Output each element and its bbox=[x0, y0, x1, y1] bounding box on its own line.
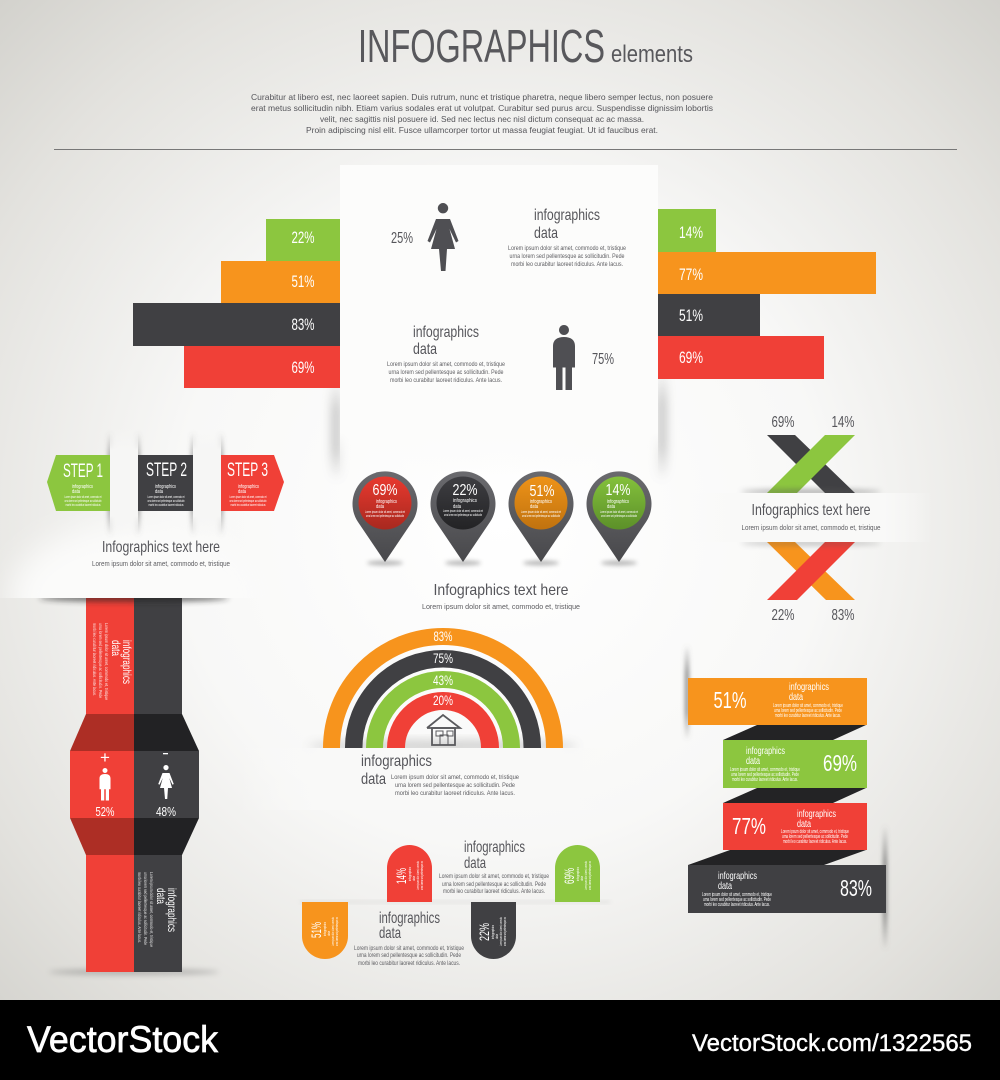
row: 83%: 83% bbox=[840, 875, 872, 901]
tab: 22%: Lorem ipsum dolor sit amet, commodo bbox=[499, 917, 503, 946]
arc labels: 75% bbox=[433, 650, 453, 666]
text block: bottom data upper bbox=[439, 839, 549, 895]
pin 69%: 69% bbox=[372, 482, 398, 499]
tab: 14%: data bbox=[411, 876, 416, 881]
label: 75%: 75% bbox=[592, 351, 614, 368]
icon: woman small bbox=[158, 765, 174, 799]
intro text: Proin adipiscing nisl elit. Fusce ullamcorper tortor ut massa feugiat feugiat. Ut id faucibus erat. bbox=[306, 125, 658, 135]
row: 51%: urna lorem sed pellentesque ac sollicitudin. Pede bbox=[774, 708, 842, 714]
text block: second data: urna lorem sed pellentesque ac sollicitudin. Pede bbox=[388, 369, 504, 376]
icon: house bbox=[427, 715, 460, 745]
upper cross bbox=[767, 435, 855, 493]
row: 77% bbox=[723, 803, 867, 850]
arc labels: 20% bbox=[433, 692, 453, 708]
row: 51%: morbi leo curabitur laoreet ridiculus. Ante lacus. bbox=[775, 713, 841, 719]
labels: 83% bbox=[832, 607, 854, 624]
step 3: morbi leo curabitur laoreet ridiculus bbox=[230, 503, 266, 507]
intro text bbox=[251, 92, 713, 135]
left bar chart: 69% bbox=[292, 358, 314, 377]
tab: 51%: Lorem ipsum dolor sit amet, commodo bbox=[331, 917, 335, 946]
pin 51%: urna lorem sed pellentesque ac sollicitudin bbox=[522, 514, 560, 518]
pin 51%: infographics bbox=[530, 499, 552, 505]
pin 51%: data bbox=[530, 504, 539, 510]
row: 77%: morbi leo curabitur laoreet ridiculus. Ante lacus. bbox=[783, 839, 847, 845]
tab: 22%: urna lorem sed pellentesque ac bbox=[503, 917, 507, 946]
text block: bottom data upper: morbi leo curabitur laoreet ridiculus. Ante lacus. bbox=[443, 888, 545, 895]
pin 22%: infographics bbox=[453, 498, 477, 504]
tab: 69%: urna lorem sed pellentesque ac bbox=[588, 861, 592, 890]
text block: bottom data lower: Lorem ipsum dolor sit amet, commodo et, tristique bbox=[354, 945, 464, 952]
tab: 69% bbox=[555, 845, 600, 902]
text block: top data bbox=[508, 207, 626, 268]
text block: top data: data bbox=[534, 225, 558, 242]
pin 51%: 51% bbox=[530, 483, 554, 500]
label: 25%: 25% bbox=[391, 230, 413, 247]
labels bbox=[772, 414, 854, 624]
step 3: Lorem ipsum dolor sit amet, commodo et bbox=[230, 495, 267, 499]
pin 69%: data bbox=[376, 504, 385, 510]
text block: top data: urna lorem sed pellentesque ac sollicitudin. Pede bbox=[510, 253, 625, 260]
pin 14%: Lorem ipsum dolor sit amet, commodo et bbox=[600, 510, 638, 514]
row: 69% bbox=[723, 740, 867, 788]
right bar chart: 77% bbox=[679, 265, 703, 284]
rotated text: lower dark: infographics bbox=[165, 888, 179, 932]
text block: arc data: Lorem ipsum dolor sit amet, commodo et, tristique bbox=[391, 774, 520, 781]
text block: second data bbox=[387, 324, 505, 384]
tab: 51%: infographics bbox=[322, 922, 327, 936]
text block: arc data: urna lorem sed pellentesque ac sollicitudin. Pede bbox=[395, 782, 515, 789]
paper strips bbox=[110, 428, 138, 538]
rotated text: lower dark: morbi leo curabitur laoreet ridiculus. Ante lacus. bbox=[136, 872, 142, 943]
step 2 bbox=[138, 455, 193, 511]
rotated text: upper red: Lorem ipsum dolor sit amet, commodo et, tristique bbox=[103, 623, 109, 700]
tab: 69%: 69% bbox=[561, 868, 577, 884]
male stat bbox=[553, 325, 614, 390]
tab: 22%: 22% bbox=[476, 923, 492, 941]
lower cross bbox=[767, 542, 855, 600]
rotated text: lower dark: data bbox=[154, 888, 168, 904]
pin 22% bbox=[430, 471, 496, 566]
step 1: urna lorem sed pellentesque ac sollicitudin bbox=[64, 499, 102, 503]
tab: 69%: Lorem ipsum dolor sit amet, commodo bbox=[584, 861, 588, 890]
row: 83%: infographics bbox=[718, 870, 757, 882]
tab: 51% bbox=[302, 902, 348, 959]
tab: 51%: data bbox=[326, 931, 331, 936]
panel: steps bbox=[8, 436, 284, 598]
folds bbox=[723, 725, 866, 740]
arc 43% bbox=[374, 680, 512, 748]
panel: X crosses bbox=[690, 414, 932, 624]
step 3 bbox=[221, 455, 284, 511]
text block: arc data: data bbox=[361, 771, 386, 788]
rotated text: upper red: infographics bbox=[120, 640, 134, 684]
caption: Lorem ipsum dolor sit amet, commodo et, tristique bbox=[742, 523, 880, 532]
text block: second data: morbi leo curabitur laoreet ridiculus. Ante lacus. bbox=[390, 377, 502, 384]
footer watermark bar bbox=[0, 1000, 1000, 1080]
row: 77%: urna lorem sed pellentesque ac sollicitudin. Pede bbox=[782, 834, 848, 840]
text block: bottom data lower: data bbox=[379, 925, 401, 942]
left bar chart: 83% bbox=[292, 315, 314, 334]
text block: top data: Lorem ipsum dolor sit amet, commodo et, tristique bbox=[508, 245, 626, 252]
icon: man bbox=[553, 325, 575, 390]
plus sign: + bbox=[100, 748, 110, 767]
step 2: urna lorem sed pellentesque ac sollicitudin bbox=[148, 499, 185, 503]
caption bbox=[92, 539, 230, 568]
pin 14%: data bbox=[607, 504, 616, 510]
text block: bottom data upper: Lorem ipsum dolor sit amet, commodo et, tristique bbox=[439, 873, 549, 880]
step 2: infographics bbox=[155, 484, 176, 490]
arc 83% bbox=[332, 636, 554, 748]
step 3: STEP 3 bbox=[227, 459, 268, 481]
row: 69%: Lorem ipsum dolor sit amet, commodo et, tristique bbox=[730, 767, 800, 773]
folds bbox=[70, 714, 134, 751]
footer watermark bar: VectorStock.com/1322565 bbox=[692, 1030, 972, 1057]
arc 75% bbox=[354, 659, 532, 748]
tab: 14%: 14% bbox=[393, 868, 409, 884]
row: 69%: morbi leo curabitur laoreet ridiculus. Ante lacus. bbox=[732, 777, 798, 783]
pin 69% bbox=[352, 471, 418, 566]
step 2: morbi leo curabitur laoreet ridiculus bbox=[148, 503, 184, 507]
step 3: urna lorem sed pellentesque ac sollicitudin bbox=[230, 499, 267, 503]
text block: arc data: morbi leo curabitur laoreet ridiculus. Ante lacus. bbox=[395, 790, 515, 797]
header divider bbox=[54, 149, 957, 150]
rotated text: lower dark: Lorem ipsum dolor sit amet, commodo et, tristique bbox=[148, 872, 154, 947]
icon: man small bbox=[100, 768, 110, 800]
tab: 51%: 51% bbox=[308, 922, 324, 938]
step 1: STEP 1 bbox=[63, 460, 103, 482]
step 1: infographics bbox=[72, 484, 93, 490]
rotated text: upper red: data bbox=[109, 640, 123, 656]
text block: bottom data lower: infographics bbox=[379, 910, 440, 927]
pin 69%: infographics bbox=[376, 499, 397, 505]
footer watermark bar: VectorStock bbox=[27, 1019, 218, 1060]
rotated text: upper red bbox=[91, 623, 134, 700]
caption: Lorem ipsum dolor sit amet, commodo et, tristique bbox=[92, 559, 230, 568]
step 2: STEP 2 bbox=[146, 459, 187, 481]
left bar chart bbox=[133, 219, 340, 388]
tab: 69%: infographics bbox=[575, 867, 580, 881]
row: 51%: 51% bbox=[714, 687, 746, 713]
pin 69%: urna lorem sed pellentesque ac sollicitudin bbox=[366, 514, 404, 518]
pin 14% bbox=[586, 471, 652, 566]
right bar chart: 69% bbox=[679, 348, 703, 367]
top paper edge shadow bbox=[39, 594, 229, 602]
step 1 bbox=[47, 455, 110, 511]
title: INFOGRAPHICS bbox=[358, 20, 605, 72]
step 2: data bbox=[155, 489, 163, 495]
row: 77%: infographics bbox=[797, 808, 836, 820]
row: 83% bbox=[688, 865, 886, 913]
right bar chart bbox=[658, 209, 876, 379]
panel: arc chart bbox=[308, 636, 578, 752]
caption: Infographics text here bbox=[102, 539, 220, 556]
text block: bottom data lower: urna lorem sed pellentesque ac sollicitudin. Pede bbox=[357, 952, 461, 959]
row: 51%: data bbox=[789, 691, 803, 703]
pin 14%: 14% bbox=[606, 482, 630, 499]
labels: 22% bbox=[772, 607, 794, 624]
pin 22%: urna lorem sed pellentesque ac sollicitudin bbox=[444, 513, 482, 517]
text block: bottom data lower bbox=[354, 910, 464, 967]
pin 51%: Lorem ipsum dolor sit amet, commodo et bbox=[521, 510, 561, 514]
minus sign bbox=[163, 753, 168, 754]
step 2: Lorem ipsum dolor sit amet, commodo et bbox=[148, 495, 185, 499]
row: 51%: infographics bbox=[789, 681, 829, 693]
row: 83%: data bbox=[718, 880, 732, 892]
middle band bbox=[70, 751, 134, 818]
panel: ribbon steps right bbox=[685, 645, 887, 950]
panel: map pins bbox=[352, 471, 652, 566]
pin caption: Infographics text here bbox=[434, 582, 569, 599]
text block: bottom data upper: infographics bbox=[464, 839, 525, 856]
caption: Infographics text here bbox=[752, 502, 871, 519]
row: 51%: Lorem ipsum dolor sit amet, commodo et, tristique bbox=[773, 703, 843, 709]
text block: arc data: infographics bbox=[361, 753, 432, 770]
pin 51% bbox=[509, 471, 574, 566]
row: 77%: data bbox=[797, 818, 811, 830]
rotated text: upper red: urna lorem sed pellentesque ac sollicitudin. Pede bbox=[97, 623, 103, 698]
pin 22%: data bbox=[453, 504, 462, 510]
rotated text: lower dark: urna lorem sed pellentesque ac sollicitudin. Pede bbox=[142, 872, 148, 945]
arc 20% bbox=[396, 701, 490, 748]
intro text: erat metus sollicitudin nibh. Etiam varius sodales erat ut volutpat. Curabitur sed purus arcu. Suspendisse dignissim lobortis bbox=[251, 103, 713, 113]
left bar chart: 22% bbox=[292, 228, 314, 247]
female stat bbox=[391, 203, 458, 271]
title: elements bbox=[611, 41, 693, 68]
tab: 14%: urna lorem sed pellentesque ac bbox=[420, 861, 424, 890]
tab: 22%: infographics bbox=[490, 925, 495, 939]
tab: 14% bbox=[387, 845, 432, 902]
row: 69%: infographics bbox=[746, 745, 785, 757]
intro text: Curabitur at libero est, nec laoreet sapien. Duis rutrum, nunc et tristique pharetra, neque libero semper lectus, non posuere bbox=[251, 92, 713, 102]
fold line bbox=[300, 901, 610, 903]
pin 14%: urna lorem sed pellentesque ac sollicitudin bbox=[601, 514, 637, 518]
panel: arc paper band bbox=[240, 748, 640, 810]
left bar chart: 51% bbox=[292, 272, 314, 291]
intro text: velit, nec sagittis nisl posuere id. Sed nec lectus nec nisl dictum consequat ac ac massa. bbox=[320, 114, 644, 124]
tab: 22% bbox=[471, 902, 516, 959]
tab: 14%: infographics bbox=[407, 867, 412, 881]
pin 22%: 22% bbox=[452, 482, 478, 499]
tab: 69%: data bbox=[579, 876, 584, 881]
tab: 22%: data bbox=[494, 934, 499, 939]
band shadow bbox=[741, 490, 881, 494]
row: 69%: urna lorem sed pellentesque ac sollicitudin. Pede bbox=[731, 772, 799, 778]
pin caption bbox=[422, 582, 580, 611]
row: 69%: 69% bbox=[823, 750, 857, 776]
text block: bottom data lower: morbi leo curabitur laoreet ridiculus. Ante lacus. bbox=[358, 960, 460, 967]
label: 52%: 52% bbox=[96, 804, 115, 819]
tab: 14%: Lorem ipsum dolor sit amet, commodo bbox=[416, 861, 420, 890]
row: 69%: data bbox=[746, 755, 760, 767]
step 1: morbi leo curabitur laoreet ridiculus bbox=[66, 503, 101, 507]
pin caption: Lorem ipsum dolor sit amet, commodo et, tristique bbox=[422, 602, 580, 611]
right bar chart: 14% bbox=[679, 223, 703, 242]
tab: 51%: urna lorem sed pellentesque ac bbox=[335, 917, 339, 946]
paper edge shadows bbox=[685, 645, 689, 740]
arc labels: 43% bbox=[433, 672, 453, 688]
row: 77%: 77% bbox=[732, 813, 766, 839]
panel: vertical gender ribbon bbox=[39, 594, 229, 975]
step 1: data bbox=[72, 489, 80, 495]
soft white paper bbox=[8, 536, 132, 598]
strip shadows bbox=[108, 432, 223, 536]
icon: woman bbox=[428, 203, 458, 271]
text block: second data: data bbox=[413, 341, 437, 358]
pin 14%: infographics bbox=[607, 499, 629, 505]
rotated text: lower dark bbox=[136, 872, 179, 947]
row: 83%: morbi leo curabitur laoreet ridiculus. Ante lacus. bbox=[704, 902, 770, 908]
pin 69%: Lorem ipsum dolor sit amet, commodo et bbox=[365, 510, 405, 514]
text block: top data: morbi leo curabitur laoreet ridiculus. Ante lacus. bbox=[511, 261, 623, 268]
row: 83%: urna lorem sed pellentesque ac sollicitudin. Pede bbox=[703, 897, 771, 903]
text block: bottom data upper: urna lorem sed pellentesque ac sollicitudin. Pede bbox=[442, 881, 546, 888]
text block: second data: Lorem ipsum dolor sit amet, commodo et, tristique bbox=[387, 361, 505, 368]
row: 51% bbox=[688, 678, 867, 725]
step 3: data bbox=[238, 489, 246, 495]
rotated text: upper red: morbi leo curabitur laoreet ridiculus. Ante lacus. bbox=[91, 623, 97, 696]
caption bbox=[742, 502, 880, 532]
labels: 69% bbox=[772, 414, 794, 431]
row: 83%: Lorem ipsum dolor sit amet, commodo et, tristique bbox=[702, 892, 772, 898]
panel: bottom tabs bbox=[300, 845, 610, 959]
paper band bbox=[690, 493, 932, 542]
pin 22%: Lorem ipsum dolor sit amet, commodo et bbox=[443, 509, 483, 513]
panel: central white sheet bbox=[332, 165, 666, 480]
row: 77%: Lorem ipsum dolor sit amet, commodo et, tristique bbox=[781, 829, 849, 835]
text block: bottom data upper: data bbox=[464, 855, 486, 872]
label: 48%: 48% bbox=[156, 804, 176, 819]
arc labels bbox=[433, 628, 453, 708]
text block: top data: infographics bbox=[534, 207, 600, 224]
text block: arc data bbox=[361, 753, 520, 797]
arc labels: 83% bbox=[434, 628, 452, 644]
right bar chart: 51% bbox=[679, 306, 703, 325]
step 1: Lorem ipsum dolor sit amet, commodo et bbox=[64, 495, 102, 499]
text block: second data: infographics bbox=[413, 324, 479, 341]
labels: 14% bbox=[832, 414, 854, 431]
step 3: infographics bbox=[238, 484, 259, 490]
